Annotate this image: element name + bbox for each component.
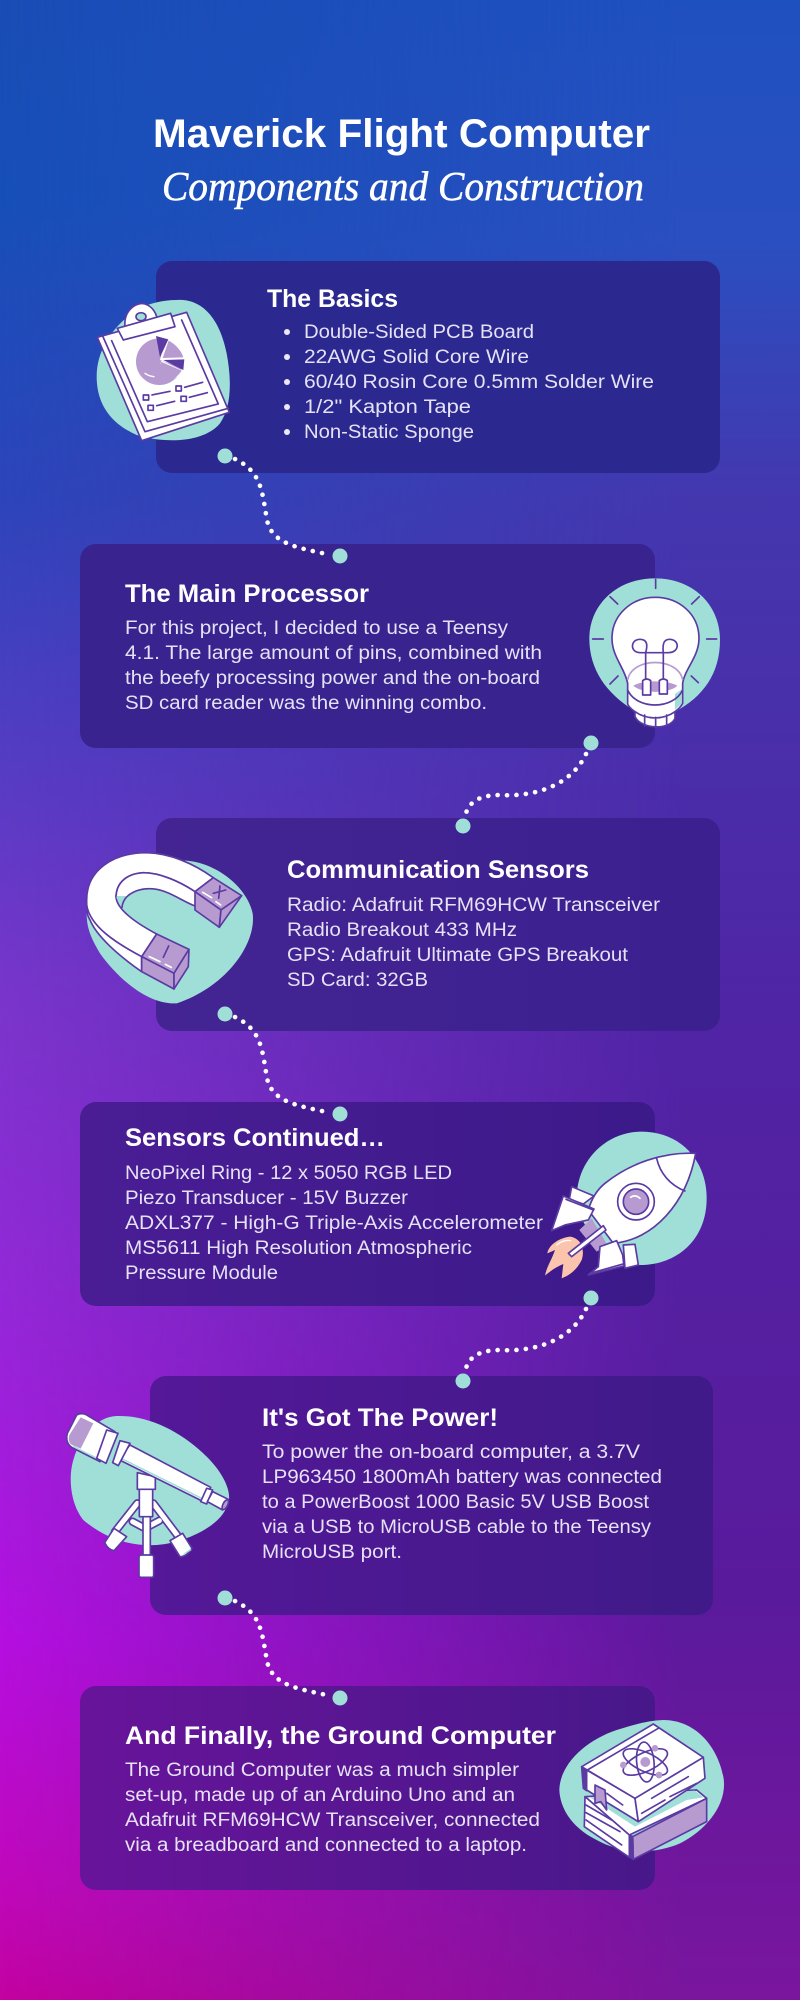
body text — [287, 895, 661, 991]
body text: Adafruit RFM69HCW Transceiver, connected — [125, 1810, 540, 1831]
body text: MicroUSB port. — [262, 1542, 402, 1563]
body text — [125, 618, 542, 714]
body text: The Ground Computer was a much simpler — [125, 1760, 520, 1781]
body text: For this project, I decided to use a Teensy — [125, 618, 509, 639]
body text: via a USB to MicroUSB cable to the Teensy — [262, 1517, 652, 1538]
title — [153, 112, 650, 209]
body text: set-up, made up of an Arduino Uno and an — [125, 1785, 515, 1806]
body text: To power the on-board computer, a 3.7V — [262, 1442, 640, 1463]
heading: It's Got The Power! — [262, 1404, 498, 1432]
icon: telescope — [67, 1414, 230, 1577]
parts list: 22AWG Solid Core Wire — [304, 347, 529, 368]
body text — [125, 1163, 544, 1284]
subtitle: Components and Construction — [162, 163, 644, 209]
icon: stacked books — [559, 1720, 724, 1859]
body text: Pressure Module — [125, 1263, 278, 1284]
body text: LP963450 1800mAh battery was connected — [262, 1467, 662, 1488]
connector arrow 4 — [456, 1290, 598, 1388]
heading: Communication Sensors — [287, 856, 589, 884]
card background — [80, 544, 655, 748]
body text: SD Card: 32GB — [287, 970, 428, 991]
panel: sensors continued — [80, 1102, 707, 1306]
body text: GPS: Adafruit Ultimate GPS Breakout — [287, 945, 629, 966]
parts list: Double-Sided PCB Board — [304, 322, 534, 343]
body text: 4.1. The large amount of pins, combined with — [125, 643, 542, 664]
main title: Maverick Flight Computer — [153, 112, 650, 156]
connector arrow 5 — [218, 1590, 348, 1706]
connector arrow 3 — [218, 1006, 348, 1122]
body text: the beefy processing power and the on-board — [125, 668, 540, 689]
icon: rocket — [545, 1132, 707, 1278]
panel: communication sensors — [87, 818, 720, 1031]
panel: the ground computer — [80, 1686, 724, 1890]
parts list: 1/2" Kapton Tape — [304, 397, 471, 418]
body text: ADXL377 - High-G Triple-Axis Accelerometer — [125, 1213, 544, 1234]
heading: The Basics — [267, 285, 398, 313]
body text: via a breadboard and connected to a laptop. — [125, 1835, 527, 1856]
body text — [262, 1442, 662, 1563]
body text: Piezo Transducer - 15V Buzzer — [125, 1188, 409, 1209]
heading: Sensors Continued… — [125, 1124, 385, 1152]
heading: The Main Processor — [125, 580, 369, 608]
connector arrow 2 — [456, 736, 598, 834]
body text: MS5611 High Resolution Atmospheric — [125, 1238, 472, 1259]
parts list: 60/40 Rosin Core 0.5mm Solder Wire — [304, 372, 654, 393]
heading: And Finally, the Ground Computer — [125, 1722, 556, 1750]
icon: light bulb — [589, 578, 720, 727]
card background — [80, 1102, 655, 1306]
icon: horseshoe magnet — [87, 853, 253, 1003]
body text: SD card reader was the winning combo. — [125, 693, 487, 714]
connector arrow 1 — [218, 448, 348, 564]
body text: to a PowerBoost 1000 Basic 5V USB Boost — [262, 1492, 650, 1513]
body text: NeoPixel Ring - 12 x 5050 RGB LED — [125, 1163, 452, 1184]
icon: clipboard with pie chart — [97, 300, 230, 441]
panel: the basics — [97, 261, 720, 473]
card background — [80, 1686, 655, 1890]
panel: the main processor — [80, 544, 720, 748]
parts list: Non-Static Sponge — [304, 422, 474, 443]
body text — [125, 1760, 540, 1856]
card background — [156, 261, 720, 473]
body text: Radio: Adafruit RFM69HCW Transceiver — [287, 895, 661, 916]
panel: it's got the power — [67, 1376, 713, 1615]
card background — [150, 1376, 713, 1615]
parts list — [284, 322, 654, 443]
body text: Radio Breakout 433 MHz — [287, 920, 517, 941]
card background — [156, 818, 720, 1031]
